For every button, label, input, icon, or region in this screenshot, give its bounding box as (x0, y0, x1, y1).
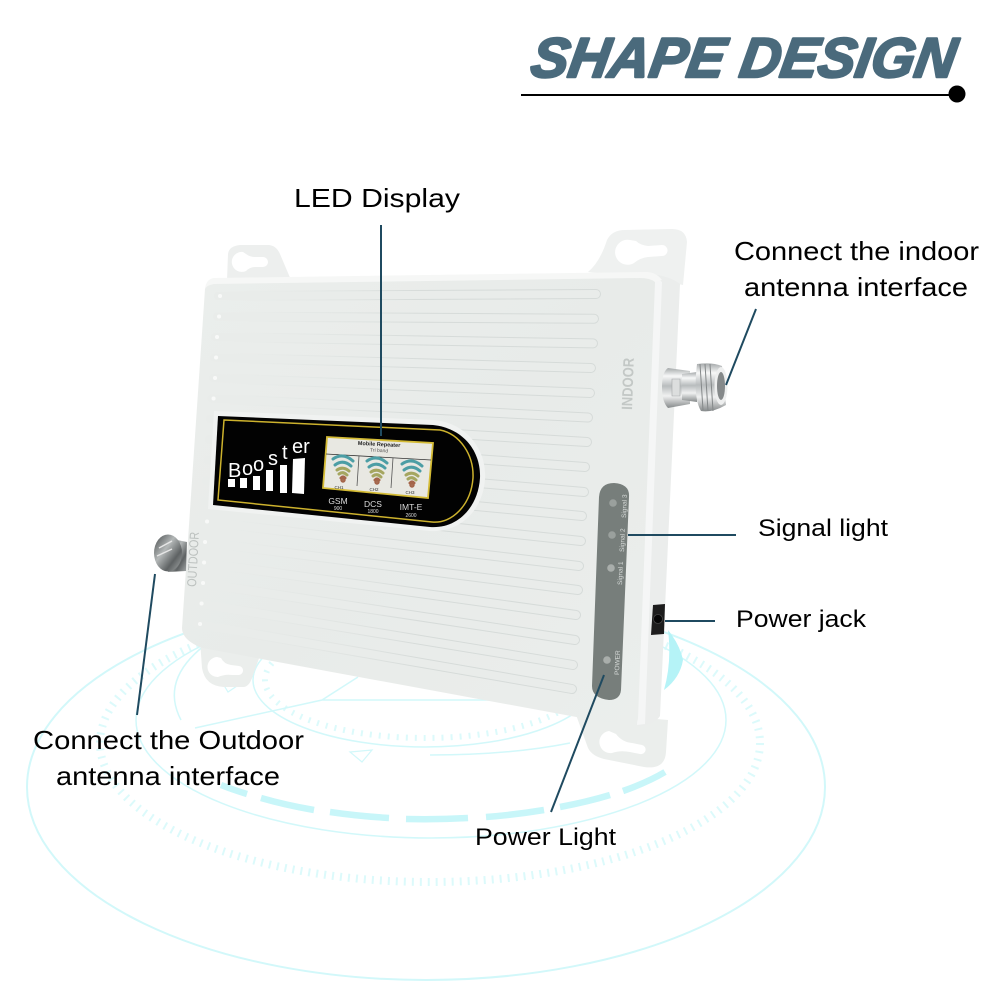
wifi icon ch2 (367, 458, 387, 483)
mounting tab bottom right (575, 712, 668, 767)
label: outdoor antenna interface (33, 725, 304, 791)
booster wordmark: B (228, 460, 241, 482)
label: led display: LED Display (294, 183, 460, 213)
indoor connector (662, 363, 728, 411)
lcd screen: CH3 (405, 490, 415, 495)
display panel (208, 411, 485, 531)
title: SHAPE DESIGN (527, 26, 962, 89)
black panel (213, 416, 480, 527)
band labels: 1800 (367, 509, 379, 515)
heat sink grooves (197, 294, 596, 689)
side rim highlight (637, 276, 662, 725)
mounting tab top right (588, 229, 687, 285)
band labels (328, 496, 423, 519)
wifi icon ch3 (402, 461, 422, 486)
leader lines (137, 225, 756, 812)
lcd screen: Mobile Repeater (358, 441, 401, 449)
lcd screen: CH1 (334, 485, 344, 490)
band labels: IMT-E (400, 502, 423, 512)
label: indoor antenna interface: Connect the indoor (734, 236, 979, 266)
title underline with dot (521, 86, 966, 102)
wifi icon ch1 (333, 456, 353, 481)
band labels: GSM (328, 496, 348, 506)
signal and power strip: Signal 1 (617, 561, 625, 585)
band labels: 900 (334, 506, 342, 512)
booster wordmark (228, 436, 310, 482)
booster wordmark: o (253, 454, 264, 476)
signal and power strip: POWER (614, 650, 622, 675)
signal and power strip: Signal 3 (621, 494, 629, 518)
booster signal bars (228, 458, 305, 494)
side face (630, 274, 680, 727)
mounting tab bottom left (200, 640, 262, 687)
booster wordmark: o (242, 458, 253, 480)
signal and power strip (592, 483, 629, 700)
label: outdoor antenna interface: Connect the Outdoor (33, 725, 304, 755)
booster wordmark: er (292, 436, 310, 458)
label: indoor antenna interface: antenna interface (744, 272, 968, 302)
band labels: 2600 (405, 513, 417, 519)
top rim highlight (205, 272, 662, 289)
outdoor label: OUTDOOR (184, 531, 202, 587)
label: signal light: Signal light (758, 515, 888, 542)
band labels: DCS (364, 499, 382, 509)
lcd screen (323, 437, 433, 498)
yellow trim (218, 420, 473, 522)
front face (182, 274, 655, 726)
mounting tab top left (227, 245, 291, 280)
lcd screen: CH2 (369, 487, 379, 492)
booster wordmark: t (282, 442, 288, 464)
label: indoor antenna interface (734, 236, 979, 302)
power jack (651, 604, 665, 635)
outdoor connector (154, 534, 187, 572)
label: power jack: Power jack (736, 606, 867, 633)
panel bevel (208, 411, 485, 531)
label: outdoor antenna interface: antenna interface (56, 761, 280, 791)
booster wordmark: s (268, 448, 278, 470)
indoor label: INDOOR (619, 357, 638, 410)
lcd screen: Tri band (370, 448, 388, 454)
booster device (154, 229, 728, 767)
background hud rings (27, 594, 825, 980)
label: power light: Power Light (475, 824, 616, 851)
signal and power strip: Signal 2 (619, 528, 627, 552)
